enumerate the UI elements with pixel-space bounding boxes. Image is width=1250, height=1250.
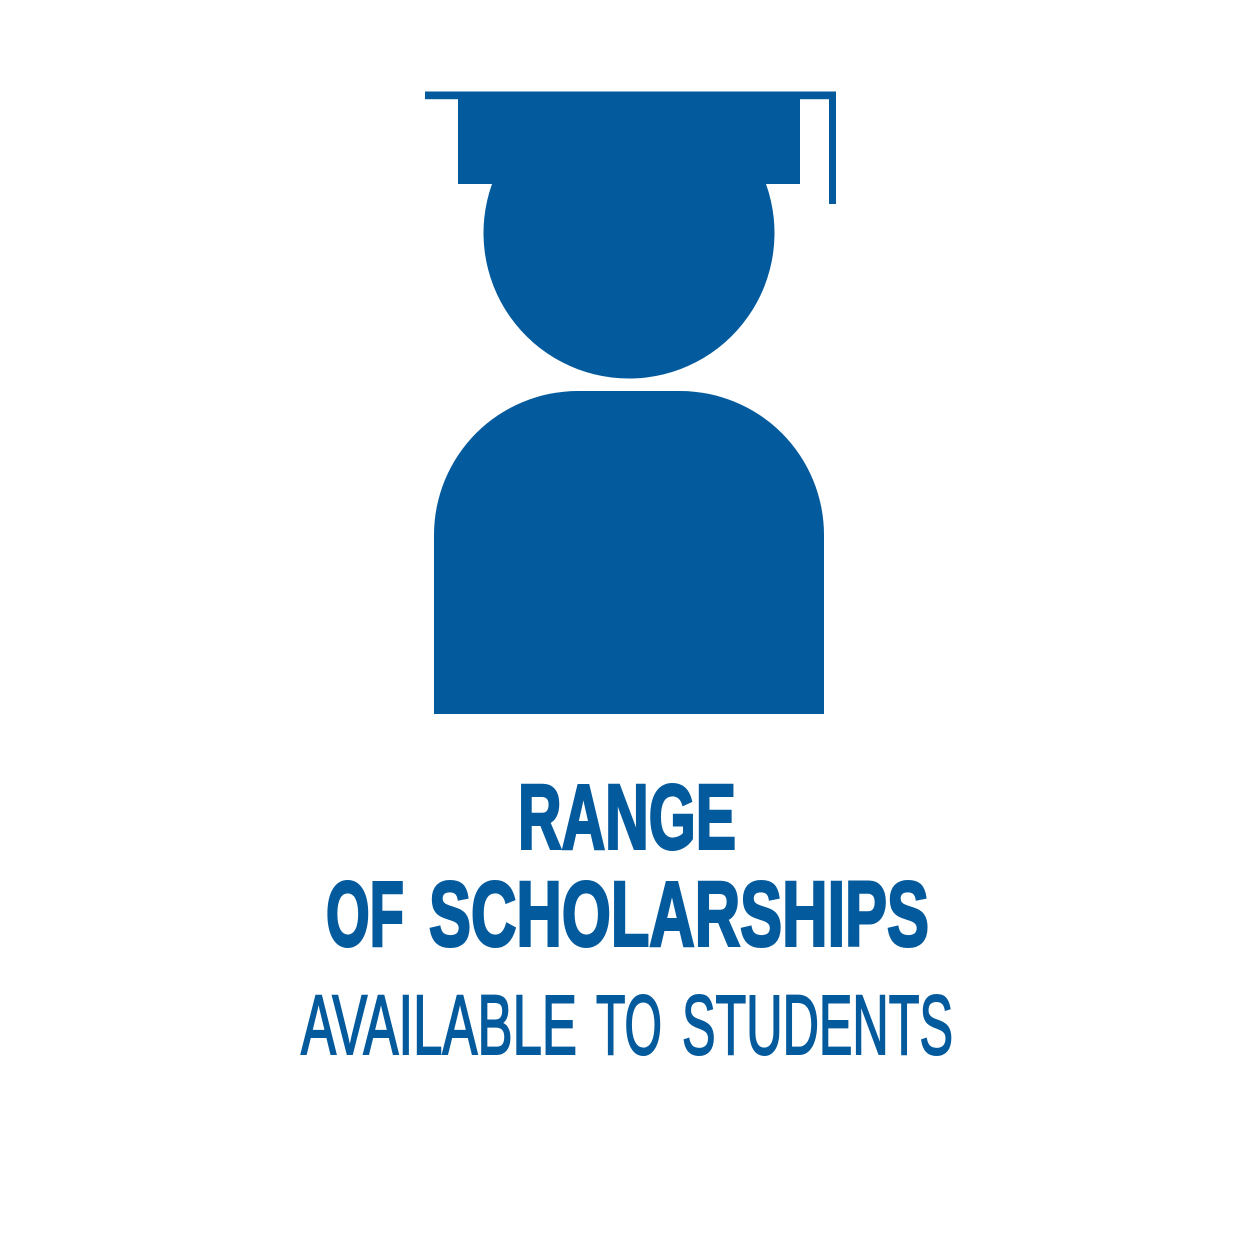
subheading: available to students: TO — [596, 978, 662, 1072]
heading: range of scholarships: RANGE — [518, 766, 736, 868]
heading: range of scholarships: SCHOLARSHIPS — [429, 864, 929, 966]
subheading: available to students — [301, 978, 953, 1072]
heading: range of scholarships — [326, 766, 929, 966]
subheading: available to students: STUDENTS — [682, 978, 953, 1072]
heading: range of scholarships: OF — [326, 864, 404, 966]
icon: graduate with mortarboard — [425, 92, 836, 714]
icon: cap top board and tassel — [425, 92, 836, 204]
subheading: available to students: AVAILABLE — [301, 978, 577, 1072]
icon: shoulders — [434, 391, 824, 714]
icon: head — [484, 184, 774, 379]
